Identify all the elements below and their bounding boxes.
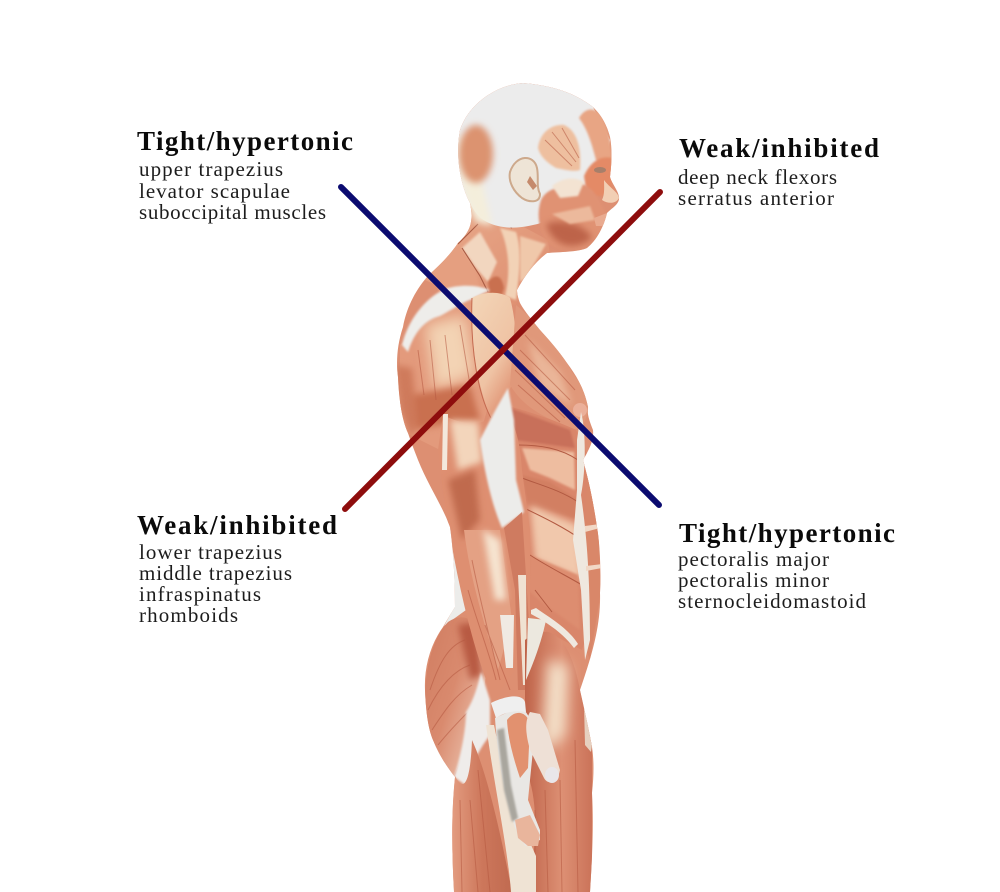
fingertips <box>515 815 540 846</box>
pectoralis <box>510 305 588 429</box>
heading: Weak/inhibited <box>679 133 879 163</box>
muscle list: rhomboids <box>139 603 238 627</box>
waist fascia <box>444 527 466 626</box>
head: cranium <box>458 83 619 250</box>
waist fascia line <box>531 608 578 648</box>
muscle list: levator scapulae <box>139 179 290 203</box>
gluteus <box>425 617 486 776</box>
pelvic sliver <box>584 705 592 752</box>
linea alba <box>573 412 590 660</box>
muscle list <box>678 165 837 210</box>
muscle list <box>139 157 326 224</box>
hand <box>495 706 560 846</box>
leg tendon band <box>486 725 536 892</box>
line: weak muscle axis (red) <box>345 192 660 509</box>
body silhouette <box>397 83 619 892</box>
white triceps tendon <box>480 388 524 528</box>
text block: bottom left weak muscles <box>137 510 337 627</box>
text block: top left tight muscles <box>137 126 353 224</box>
nose <box>602 180 619 203</box>
upper back and latissimus <box>397 300 486 448</box>
muscle list: sternocleidomastoid <box>678 589 866 613</box>
muscle list: middle trapezius <box>139 561 292 585</box>
abdominal wall <box>505 405 602 660</box>
rectus abdominis <box>586 474 600 660</box>
line: tight muscle axis (blue) <box>341 187 659 505</box>
neck muscles <box>425 205 550 301</box>
muscle list <box>678 547 866 613</box>
hip tendon white <box>454 672 490 790</box>
ear <box>510 158 540 201</box>
thigh rear <box>452 740 512 892</box>
muscle list: suboccipital muscles <box>139 200 326 224</box>
eye <box>594 167 606 173</box>
thumb <box>526 712 560 782</box>
muscle list <box>139 540 292 627</box>
lips <box>594 213 607 226</box>
muscle list: infraspinatus <box>139 582 261 606</box>
white shoulder tendon <box>402 286 490 352</box>
illustration: side view of muscular human figure <box>395 83 619 892</box>
upper arm <box>438 388 530 690</box>
muscle: jaw and cheek <box>539 184 606 250</box>
muscle: occipitalis <box>459 125 493 183</box>
tendon strip at the elbow <box>500 615 514 668</box>
deltoid <box>472 293 517 420</box>
muscle list: pectoralis major <box>678 547 829 571</box>
heading: Tight/hypertonic <box>679 518 895 548</box>
muscle list: deep neck flexors <box>678 165 837 189</box>
text block: bottom right tight muscles <box>678 518 895 613</box>
heading: Tight/hypertonic <box>137 126 353 156</box>
muscle: temporalis fan <box>538 125 580 171</box>
muscle: frontalis <box>579 110 612 172</box>
muscle list: upper trapezius <box>139 157 283 181</box>
muscle: orbital area <box>584 157 616 196</box>
triceps belly <box>464 530 512 670</box>
wrist band <box>491 696 526 718</box>
thigh front <box>525 632 592 892</box>
heading: Weak/inhibited <box>137 510 337 540</box>
muscle list: serratus anterior <box>678 186 834 210</box>
muscle list: pectoralis minor <box>678 568 829 592</box>
muscle list: lower trapezius <box>139 540 282 564</box>
text block: top right weak muscles <box>678 133 879 210</box>
